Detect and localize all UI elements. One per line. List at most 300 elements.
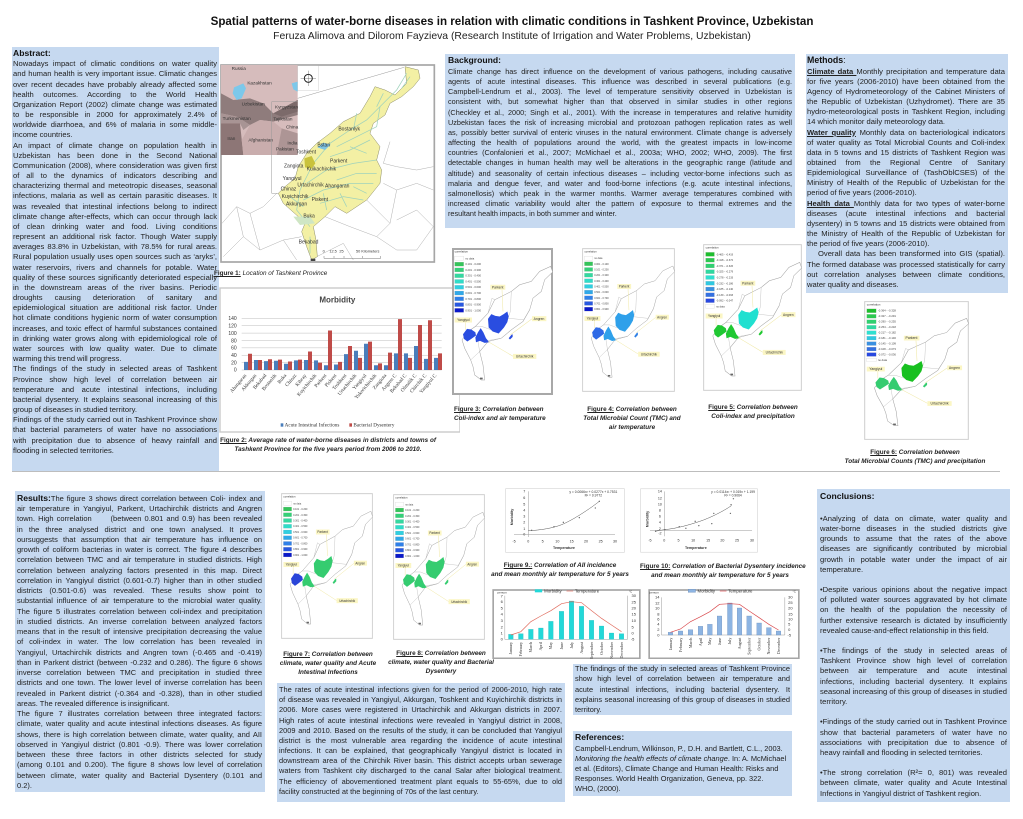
background text: Campbell-Lendrum et al., 2003). The level of temperature sensitivity observed in Uzbekistan is bbox=[448, 87, 792, 96]
methods text: the Ministry of Health of the Republic of Uzbekistan for bbox=[807, 229, 1005, 238]
chart: AII morbidity and temperature by month: April bbox=[538, 641, 543, 650]
caption: figure 2: Tashkent Province for the five years period from 2006 to 2010. bbox=[234, 446, 421, 453]
panel: results bbox=[15, 491, 265, 792]
results text: climate, water quality and acute intestinal infections diseases. As figure bbox=[17, 719, 262, 728]
figure 1: location map: China bbox=[286, 124, 299, 129]
figure 8: map climate, water quality and bacterial dysentery: 0.701 - 0.800 bbox=[405, 543, 420, 547]
figure 9: scatter all incidence vs temperature: 25 bbox=[599, 539, 603, 543]
conclusions text: on the health of the population the necessity of bbox=[820, 605, 1007, 614]
abstract text: droughts causing deterioration of sanitary and bbox=[13, 293, 217, 302]
results text: air temperature in Yangiyul, Parkent, Urtachirchik districts and Angren bbox=[17, 504, 262, 513]
results text: oursuggests that assumption that air temperature has influence on bbox=[17, 535, 262, 544]
figure 4: map TMC and air temperature: 0.201 - 0.300 bbox=[594, 274, 609, 277]
divider line bbox=[12, 471, 1000, 472]
figure 8: map climate, water quality and bacterial dysentery: 0.501 - 0.600 bbox=[405, 532, 420, 535]
figure 9: scatter all incidence vs temperature: 30 bbox=[613, 539, 617, 543]
panel: conclusions bbox=[817, 489, 1010, 802]
figure 1: location map: 0 bbox=[323, 249, 325, 253]
results text: inverse correlation between TMC and precipitation in studied three bbox=[17, 668, 262, 677]
rates text: of disease was revealed in Yangiyul, Akkurgan, Toshkent and Kuyichirchik districts in bbox=[279, 695, 562, 704]
chart: AII morbidity and temperature by month: 4 bbox=[501, 612, 504, 617]
chart: bacterial dysentery morbidity and temperature by month: 15 bbox=[788, 611, 793, 616]
figure 9: scatter all incidence vs temperature: 5 bbox=[542, 539, 544, 543]
figure 10: scatter bacterial dysentery vs temperature: 4 bbox=[659, 521, 661, 525]
caption: figure 7 bbox=[280, 651, 376, 676]
abstract text: that bacterial parameters of water have no associations bbox=[13, 425, 217, 434]
figure 6: map TMC and precipitation: -0.254 - -0.218 bbox=[878, 325, 897, 329]
findings text bbox=[575, 664, 790, 714]
figure 5: map coli-index and precipitation: -0.185 - -0.140 bbox=[716, 287, 734, 291]
caption: figure 5: Figure 5: Correlation between bbox=[708, 404, 798, 411]
figure 10: scatter bacterial dysentery vs temperature: 8 bbox=[659, 509, 661, 513]
figure 6: map TMC and precipitation: -0.181 - -0.146 bbox=[878, 336, 897, 340]
results text: between these three factors in other districts selected for study bbox=[17, 750, 262, 759]
references text: Monitoring the health effects of climate change. In: A. McMichael bbox=[575, 754, 786, 763]
figure 9: scatter all incidence vs temperature: 20 bbox=[584, 539, 588, 543]
conclusions text: further extensive research is dictated by insufficiently bbox=[820, 616, 1007, 625]
abstract text: warming this trend will progress. bbox=[13, 354, 121, 363]
chart: AII morbidity and temperature by month: person bbox=[498, 590, 507, 594]
results text: observed in Yangiyul district (0.801 -0.9). There was lower correlation bbox=[17, 740, 262, 749]
chart: bacterial dysentery morbidity and temperature by month: 20 bbox=[788, 606, 793, 611]
conclusions text: •Findings of the study carried out in Tashkent Province bbox=[820, 717, 1007, 726]
results text: town. High correlation (between 0.801 and 0.9) has been revealed bbox=[17, 514, 262, 523]
figure 7: map climate, water quality and AII: no data bbox=[293, 502, 302, 505]
methods text: hydro-meteorological posts in Tashkent Region, including bbox=[807, 107, 1005, 116]
conclusions text: •Analyzing of data on climate, water quality and bbox=[820, 514, 1007, 523]
rates text: facility constructed at the beginning of 70s of the last century. bbox=[279, 787, 479, 796]
methods text: Ministry of Health of the Republic of Uzbekistan for the bbox=[807, 178, 1005, 187]
abstract text: averages 83.8% in Uzbekistan, with 78.5% for rural areas. bbox=[13, 242, 217, 251]
methods text: Health data Monthly data for two types of water-borne bbox=[807, 199, 1005, 208]
methods text: diseases (acute intestinal infections and bacterial bbox=[807, 209, 1005, 218]
figure 2: morbidity bar chart: Urtachirchik bbox=[337, 373, 358, 397]
figure 2: morbidity bar chart: Yukorichirchik bbox=[354, 373, 378, 401]
abstract text: water sources with low quality water. Due to climate bbox=[13, 344, 217, 353]
figure 6: map TMC and precipitation: -0.217 - -0.182 bbox=[878, 331, 897, 335]
figure 3: map coli-index and air temperature: no data bbox=[465, 256, 475, 260]
chart: AII morbidity and temperature by month: August bbox=[579, 641, 584, 654]
figure 5: map coli-index and precipitation: -0.278 - -0.233 bbox=[716, 275, 734, 279]
caption: figure 3 bbox=[454, 406, 546, 422]
figure 5: map coli-index and precipitation: no data bbox=[716, 304, 725, 308]
figure 4: map TMC and air temperature: 0.701 - 0.800 bbox=[594, 302, 609, 305]
results text: revealed in Parkent district (-0.364 and -0.328), than in other studied bbox=[17, 689, 262, 698]
caption: figure 7: climate, water quality and Acute bbox=[280, 660, 376, 667]
figure 1: location map: Chinaz bbox=[281, 187, 297, 193]
figure 3: map coli-index and air temperature: 0.401 - 0.500 bbox=[465, 279, 481, 283]
methods text: obtained from the Regional Centre of Sanitary bbox=[807, 158, 1005, 167]
figure 1: location map: 50 Kilometers bbox=[356, 249, 379, 253]
figure 7: map climate, water quality and AII: 0.301 - 0.400 bbox=[293, 519, 308, 523]
chart: bacterial dysentery morbidity and temperature by month: 5 bbox=[788, 622, 791, 627]
chart: bacterial dysentery morbidity and temperature by month: 8 bbox=[657, 611, 660, 616]
abstract text: quality of these sources significantly deteriorated especially bbox=[13, 273, 217, 282]
chart: AII morbidity and temperature by month: 1 bbox=[501, 631, 504, 636]
panel: rates of acute intestinal infections bbox=[277, 683, 565, 802]
abstract text: The findings of the study in selected areas of Tashkent bbox=[13, 364, 217, 373]
figure 9: scatter all incidence vs temperature: 5 bbox=[523, 502, 525, 506]
figure 3: map coli-index and air temperature: 0.601 - 0.700 bbox=[465, 291, 481, 295]
chart: AII morbidity and temperature by month: March bbox=[528, 642, 533, 652]
rates text bbox=[279, 685, 562, 796]
figure 1: location map: Kuikachirchik bbox=[307, 167, 337, 173]
chart: AII morbidity and temperature by month: September bbox=[589, 641, 594, 659]
methods text: the Republic of Uzbekistan (Uzhydromet). There are 35 bbox=[807, 97, 1005, 106]
figure 4: map TMC and air temperature: 0.301 - 0.400 bbox=[594, 280, 609, 283]
caption: figure 8: Figure 8: Correlation between bbox=[396, 650, 486, 657]
caption: figure 8: climate, water quality and Bacterial bbox=[388, 659, 494, 666]
conclusions text: between climate, water quality and Acute Intestinal bbox=[820, 778, 1007, 787]
chart: bacterial dysentery morbidity and temperature by month: 4 bbox=[657, 622, 660, 627]
chart: bacterial dysentery morbidity and temperature by month: October bbox=[756, 637, 762, 651]
chart: bacterial dysentery morbidity and temperature by month: November bbox=[766, 637, 771, 655]
figure 9: scatter all incidence vs temperature: 0 bbox=[523, 533, 525, 537]
background text: affecting the health of populations around the world, with the greatest impacts in low-income bbox=[448, 138, 792, 147]
figure 9: scatter all incidence vs temperature: 10 bbox=[555, 539, 559, 543]
figure 9: scatter all incidence vs temperature: 7 bbox=[523, 490, 525, 494]
figure 7: map climate, water quality and AII: 0.701 - 0.800 bbox=[293, 542, 308, 546]
figure 1: location map: Turkmenistan bbox=[223, 116, 251, 121]
figure 2: morbidity bar chart: 80 bbox=[231, 338, 237, 344]
chart: bacterial dysentery morbidity and temperature by month: December bbox=[776, 637, 781, 654]
abstract text: health outcomes. According to the World Health bbox=[13, 90, 217, 99]
findings text: The findings of the study in selected areas of Tashkent Province bbox=[575, 664, 790, 673]
background text: countries (Confalonieri et al., 2007; McMichael et al., 2003a; WHO, 2002; WHO, 2009). The first bbox=[448, 148, 792, 157]
figure 2: morbidity bar chart: 0 bbox=[234, 368, 237, 374]
figure 1: location map: Afghanistan bbox=[248, 138, 273, 143]
methods text: Water quality Monthly data on bacteriological indicators bbox=[807, 128, 1005, 137]
methods text: 14 which monitor daily meteorology data. bbox=[807, 117, 945, 126]
figure 9: scatter all incidence vs temperature: Morbidity bbox=[510, 508, 514, 525]
conclusions text: •The strong correlation (R²= 0, 801) was revealed bbox=[820, 768, 1007, 777]
figure 3: map coli-index and air temperature: 0.901 - 1.000 bbox=[465, 308, 481, 312]
chart: AII morbidity and temperature by month: 5 bbox=[501, 605, 504, 610]
figure 5: map coli-index and precipitation: -0.465 - -0.419 bbox=[716, 252, 734, 256]
conclusions text: revealed cause-and-effect relationship in this field. bbox=[820, 626, 989, 635]
figure 1: location map: Russia bbox=[232, 66, 246, 71]
figure 1: location map: Toshkent bbox=[296, 149, 317, 155]
chart: bacterial dysentery morbidity and temperature by month: 0 bbox=[788, 627, 791, 632]
figure 7: map climate, water quality and AII: 0.501 - 0.600 bbox=[293, 531, 308, 534]
methods text: Overall data has been transformed into GIS (spatial). bbox=[818, 249, 1005, 258]
figure 6: map TMC and precipitation: -0.290 - -0.255 bbox=[878, 320, 897, 324]
findings text: explains seasonal increasing of this group of diseases in studied bbox=[575, 695, 790, 704]
background text: (Checkley et al., 2000; Singh et al., 2001). With the increase in temperatures and relative humidity bbox=[448, 108, 792, 117]
figure 8: map climate, water quality and bacterial dysentery: 0.601 - 0.700 bbox=[405, 538, 420, 541]
figure 2: morbidity bar chart: Yangiyul bbox=[352, 373, 369, 391]
figure 10: scatter bacterial dysentery vs temperature: Morbidity bbox=[646, 511, 650, 527]
methods text: of water quality as Total Microbial Counts and Coli-index bbox=[807, 138, 1005, 147]
figure 2: morbidity bar chart: Olmalik C bbox=[400, 373, 419, 394]
chart: bacterial dysentery morbidity and temperature by month: January bbox=[668, 638, 673, 650]
chart: AII morbidity and temperature by month: -5 bbox=[631, 637, 635, 642]
chart: AII morbidity and temperature by month: 0 bbox=[501, 637, 504, 642]
figure 10: scatter bacterial dysentery vs temperature: 12 bbox=[658, 496, 662, 500]
chart: bacterial dysentery morbidity and temperature by month: 6 bbox=[657, 617, 660, 622]
figure 8: map climate, water quality and bacterial dysentery: no data bbox=[405, 503, 414, 506]
figure 1: location map: Urtachirchik bbox=[297, 183, 324, 189]
heading: background: Background: bbox=[448, 55, 501, 65]
chart: bacterial dysentery morbidity and temperature by month: 10 bbox=[655, 606, 660, 611]
results text: correlation between TMC and air temperature in studied districts. High bbox=[17, 555, 262, 564]
abstract text: Province show high level of correlation between air bbox=[13, 375, 217, 384]
results text: districts (0.501-0.6) was revealed. These results show point to bbox=[17, 586, 262, 595]
figure 5: map coli-index and precipitation: -0.139 - -0.093 bbox=[716, 293, 734, 297]
figure 2: morbidity bar chart: 100 bbox=[228, 331, 237, 337]
rates text: 2009 and 2010. Based on the results of the study, it can be concluded that Yangiyul bbox=[279, 726, 562, 735]
methods text: The formed database was processed statistically for carry bbox=[807, 260, 1005, 269]
figure 8: map climate, water quality and bacterial dysentery: 0.301 - 0.400 bbox=[405, 520, 420, 524]
background text: resultant health impacts, in both summer and winter. bbox=[448, 209, 617, 218]
figure 6: map TMC and precipitation: -0.072 - -0.036 bbox=[878, 353, 897, 356]
chart: bacterial dysentery morbidity and temperature by month: person bbox=[650, 590, 659, 594]
figure 2: morbidity bar chart: Akkurgan bbox=[240, 373, 258, 393]
figure 4: map TMC and air temperature: correlation bbox=[584, 249, 597, 254]
figure 1: location map: Kuyichirchik bbox=[282, 194, 309, 200]
methods text: dysentery) in 5 towns and 15 districts were obtained from bbox=[807, 219, 1005, 228]
chart: AII morbidity and temperature by month: February bbox=[518, 642, 523, 656]
figure 7: map climate, water quality and AII bbox=[281, 493, 373, 639]
figure 8: map climate, water quality and bacterial dysentery: correlation bbox=[395, 496, 408, 500]
abstract text: Communication (2008), where consideration was given first bbox=[13, 161, 217, 170]
heading: methods: Methods: bbox=[807, 55, 846, 65]
figure 9: scatter all incidence vs temperature: 0 bbox=[527, 539, 529, 543]
figure 6: map TMC and precipitation: -0.364 - -0.328 bbox=[878, 309, 897, 313]
abstract text: Organization Report (2002) climate change was estimated bbox=[13, 100, 217, 109]
background text: altitude) and seasonality of certain infectious diseases – including vector-borne infections such as bbox=[448, 169, 792, 178]
figure 2: morbidity bar chart: 40 bbox=[231, 353, 237, 359]
figure 7: map climate, water quality and AII: correlation bbox=[283, 495, 296, 499]
rates text: High rates of acute intestinal infections were revealed in Yangiyul district in 2008, bbox=[279, 716, 562, 725]
abstract text: of clean drinking water and food. Living conditions bbox=[13, 222, 217, 231]
figure 5: map coli-index and precipitation: -0.418 - -0.372 bbox=[716, 258, 734, 262]
authors subtitle: Feruza Alimova and Dilorom Fayzieva (Research Institute of Irrigation and Water Problems, Uzbekistan) bbox=[273, 31, 751, 42]
chart: bacterial dysentery morbidity and temperature by month: April bbox=[698, 637, 703, 646]
caption: figure 2: Figure 2: Average rate of water-borne diseases in districts and towns of bbox=[220, 437, 436, 444]
results text: in studied districts. An inverse correlation between analyzed factors bbox=[17, 617, 262, 626]
figure 9: scatter all incidence vs temperature: Temperature bbox=[553, 546, 575, 550]
results text bbox=[17, 493, 262, 790]
chart: bacterial dysentery morbidity and temperature by month: °C bbox=[793, 590, 797, 594]
figure 2: morbidity bar chart: 120 bbox=[228, 323, 237, 329]
figure 2: morbidity bar chart: Morbidity bbox=[319, 295, 356, 304]
figure 4: map TMC and air temperature: 0.801 - 0.900 bbox=[594, 308, 609, 311]
background text: Uzbekistan faces the risk of increasing microbial and protozoan pathogen replication rates as well bbox=[448, 118, 792, 127]
chart: bacterial dysentery morbidity and temperature by month: June bbox=[717, 637, 722, 645]
background text: agents of acute intestinal diseases. This influence was described in several publications (e.g. bbox=[448, 77, 792, 86]
chart: bacterial dysentery morbidity and temperature by month: September bbox=[746, 637, 752, 655]
conclusions text: •Despite various opinions about the negative impact bbox=[820, 585, 1007, 594]
abstract text: infections, malaria as well as certain parasitic diseases. It bbox=[13, 191, 217, 200]
chart: AII morbidity and temperature by month: December bbox=[619, 641, 624, 658]
methods text: the period of five years (2006-2010). bbox=[807, 239, 929, 248]
chart: bacterial dysentery morbidity and temperature by month: February bbox=[678, 638, 683, 652]
caption: figure 10: and mean monthly air temperature for 5 years bbox=[651, 572, 789, 579]
abstract text: to be responsible in 2000 for approximately 2.4% of bbox=[13, 110, 217, 119]
figure 6: map TMC and precipitation: correlation bbox=[867, 303, 881, 306]
figure 4: map TMC and air temperature: no data bbox=[594, 257, 603, 260]
abstract text: group of diseases in studied territory. bbox=[13, 405, 137, 414]
figure 10: scatter bacterial dysentery vs temperature: R² = 0.9064 bbox=[724, 493, 742, 497]
chart: bacterial dysentery morbidity and temperature by month: 2 bbox=[657, 627, 660, 632]
chart: AII morbidity and temperature by month: 3 bbox=[501, 618, 504, 623]
figure 1: location map: Bostanlyk bbox=[338, 127, 361, 133]
figure 3: map coli-index and air temperature: correlation bbox=[455, 250, 468, 254]
conclusions text: show that bacterial parameters of water have no bbox=[820, 728, 1007, 736]
figure 4: map TMC and air temperature: 0.001 - 0.100 bbox=[594, 263, 609, 266]
figure 10: scatter bacterial dysentery vs temperature: -5 bbox=[648, 538, 652, 542]
figure 1: location map: Bekabad bbox=[299, 239, 319, 245]
figure 1: location map: Tajikistan bbox=[273, 117, 293, 122]
figure 4: map TMC and air temperature: 0.101 - 0.200 bbox=[594, 268, 609, 271]
figure 6: map TMC and precipitation: no data bbox=[878, 358, 888, 362]
rates text: The efficiency of abovementioned treatment plant equals to 55-65%, due to old bbox=[279, 777, 562, 786]
conclusions text: water-borne diseases in the studied districts give bbox=[820, 524, 1007, 533]
rates text: infections. It can be explained, that geographically Yangiyul district is located in bbox=[279, 746, 562, 755]
caption: figure 9: Figure 9.: Correlation of AII incidence bbox=[504, 562, 616, 569]
rates text: waters from Tashkent city discharged to the canal Salar after biological treatment. bbox=[279, 766, 562, 775]
results text: growth of coliform bacterias in water is correct. The figure 4 describes bbox=[17, 545, 262, 554]
rates text: district is the most vulnerable area regarding the incidence of acute intestinal bbox=[279, 736, 562, 745]
chart: bacterial dysentery morbidity and temperature by month: March bbox=[688, 638, 693, 648]
chart: bacterial dysentery morbidity and temperature by month: 10 bbox=[788, 617, 793, 622]
results text: Yangiyul, Urtachirchik districts and Angren town (-0.465 and -0.419) bbox=[17, 648, 262, 657]
figure 2: morbidity bar chart: Piskent bbox=[324, 373, 339, 389]
figure 10: scatter bacterial dysentery vs temperature: y = 0.0114x² + 0.019x + 1.199 bbox=[711, 490, 755, 494]
figure 2: morbidity bar chart: 60 bbox=[231, 346, 237, 352]
results text: The figure 5 illustrates correlation between coli-index and precipitation bbox=[17, 607, 262, 616]
conclusions text: territory. bbox=[820, 697, 847, 706]
chart: bacterial dysentery morbidity and temperature by month: 14 bbox=[655, 595, 660, 600]
figure 2: morbidity bar chart: Parkent bbox=[313, 373, 329, 389]
references text: Campbell-Lendrum, Wilkinson, P., D.H. and Bartlett, C.L., 2003. bbox=[575, 744, 783, 753]
background text bbox=[448, 67, 792, 218]
background text: malaria and dengue fever, and water and food-borne infections (e.g. acute intestinal infections, bbox=[448, 179, 792, 188]
chart: AII morbidity and temperature by month: 5 bbox=[632, 624, 634, 629]
conclusions text: diseases are significantly contributed by microbial bbox=[820, 544, 1007, 553]
figure 3: map coli-index and air temperature: 0.101 - 0.200 bbox=[465, 262, 481, 266]
chart: AII morbidity and temperature by month: 20 bbox=[632, 606, 637, 611]
abstract text: Rural population usually uses open sources such as ‘aryks’, bbox=[13, 252, 217, 261]
caption: figure 7: Intestinal Infections bbox=[298, 669, 358, 676]
figure 9: scatter all incidence vs temperature: 2 bbox=[523, 521, 525, 525]
chart: bacterial dysentery morbidity and temperature by month: August bbox=[737, 637, 742, 649]
figure 2: morbidity bar chart: Chinaz bbox=[284, 373, 299, 388]
title: Spatial patterns of water-borne diseases in relation with climatic conditions in Tashkent Province, Uzbekistan bbox=[211, 15, 813, 28]
figure 5: map coli-index and precipitation: -0.371 - -0.326 bbox=[716, 264, 734, 268]
figure 2: morbidity bar chart: Toshkent bbox=[331, 373, 349, 391]
figure 10: scatter bacterial dysentery vs temperature: -2 bbox=[658, 532, 662, 536]
figure 8: map climate, water quality and bacterial dysentery: 0.801 - 0.900 bbox=[405, 549, 420, 552]
findings text: show high level of correlation between air temperature and bbox=[575, 674, 790, 683]
results text: 0.2). bbox=[17, 781, 32, 790]
figure 5: map coli-index and precipitation: -0.325 - -0.279 bbox=[716, 270, 734, 274]
conclusions text: heavy rainfall and flooding in selected territories. bbox=[820, 748, 983, 757]
chart: bacterial dysentery morbidity and temperature by month: -5 bbox=[788, 632, 792, 637]
chart: AII morbidity and temperature by month: 7 bbox=[501, 593, 504, 598]
heading: references: References: bbox=[575, 732, 624, 742]
caption: figure 7: Figure 7: Correlation between bbox=[283, 651, 373, 658]
figure 10: scatter bacterial dysentery vs temperature: 10 bbox=[691, 538, 695, 542]
figure 2: morbidity bar chart: Bekabad C bbox=[389, 373, 409, 394]
figure 1: location map: Iran bbox=[227, 136, 236, 141]
conclusions text: Infections in Yangiyul district of Tashkent region. bbox=[820, 789, 981, 798]
figure 1: location map: Piskent bbox=[312, 197, 329, 203]
conclusions text: Tashkent Province show high level of correlation bbox=[820, 656, 1007, 665]
figure 1: location map bbox=[220, 64, 436, 263]
results text: substantial influence of air temperature to the microbial water quality. bbox=[17, 596, 262, 605]
results text: in the three analysed district and one town analysed. It proves bbox=[17, 525, 262, 534]
figure 2: morbidity bar chart: 20 bbox=[231, 360, 237, 366]
figure 4: map TMC and air temperature: 0.401 - 0.500 bbox=[594, 285, 609, 288]
figure 3: map coli-index and air temperature: 0.201 - 0.300 bbox=[465, 268, 481, 272]
figure 3: map coli-index and air temperature: 0.501 - 0.600 bbox=[465, 285, 481, 289]
references text: Responses. World Health Organization, Geneva, pp. 322. bbox=[575, 774, 763, 783]
figure 1: location map: Uzbekistan bbox=[242, 101, 265, 106]
figure 2: morbidity bar chart: Angren C bbox=[381, 373, 399, 392]
figure 2: morbidity bar chart: 140 bbox=[228, 316, 237, 322]
background text: Climate change has direct influence on the development of various pathogens, including causative bbox=[448, 67, 792, 76]
chart: AII morbidity and temperature by month: 2 bbox=[501, 624, 504, 629]
caption: figure 5: Coli-index and precipitation bbox=[711, 413, 795, 420]
background text: increased climatic variability would alter the pattern of exposure to thermal extremes and the bbox=[448, 199, 792, 208]
results text: than in Parkent district (between -0.232 and 0.286). The figure 6 shows bbox=[17, 658, 262, 667]
rates text: The rates of acute intestinal infections given for the period of 2006-2010, high rate bbox=[279, 685, 562, 694]
figure 10: scatter bacterial dysentery vs temperature: 15 bbox=[706, 538, 710, 542]
chart: AII morbidity and temperature by month: July bbox=[569, 642, 574, 649]
chart: AII morbidity and temperature by month: 25 bbox=[632, 599, 637, 604]
chart: AII morbidity and temperature by month: 10 bbox=[632, 618, 637, 623]
abstract text: in drinking water grows along with epidemiological role of bbox=[13, 334, 217, 343]
figure 9: scatter all incidence vs temperature: y = 0.0066x² + 0.0277x + 0.7531 bbox=[569, 490, 617, 494]
results text: areas. The revealed difference is insignificant. bbox=[17, 699, 169, 708]
caption: figure 9: and mean monthly air temperature for 5 years bbox=[491, 571, 629, 578]
heading: abstract: Abstract: bbox=[13, 48, 51, 58]
rates text: 2006. More cases were registered in Urtachirchik and Akkurgan districts in 2007. bbox=[279, 705, 562, 714]
caption: figure 4: Figure 4: Correlation between bbox=[587, 406, 677, 413]
abstract text: was revealed that intestinal infections belong to indirect bbox=[13, 202, 217, 211]
conclusions text: infections, including bacterial dysentery. It explains bbox=[820, 677, 1007, 686]
figure 3: map coli-index and air temperature bbox=[452, 248, 553, 395]
results text: The figure 7 illustrates correlation between three integrated factors: bbox=[17, 709, 262, 718]
caption: figure 4: air temperature bbox=[609, 424, 655, 431]
figure 1: location map: Buka bbox=[303, 213, 315, 219]
figure 1: location map: Kazakhstan bbox=[247, 81, 272, 86]
chart: bacterial dysentery morbidity and temperature by month: 12 bbox=[655, 600, 660, 605]
findings text: acute intestinal infections, including bacterial dysentery. It bbox=[575, 685, 790, 694]
results text: districts and one town. The lower level of inverse correlation has been bbox=[17, 678, 262, 687]
abstract text: temperature and acute intestinal infections, including bbox=[13, 385, 217, 394]
figure 1: location map: 12.5 bbox=[329, 249, 337, 253]
figure 1: location map: Parkent bbox=[330, 159, 348, 165]
abstract text: worldwide diarrhoea, and 6% of malaria in some middle- bbox=[13, 120, 217, 129]
abstract text: in the downstream areas of the river basins. Periodic bbox=[13, 283, 217, 292]
results text: of coli-index in water. The low correlation has been revealed in bbox=[17, 637, 262, 646]
methods text: data in 5 towns and 15 districts of Tashkent Region was bbox=[807, 148, 1005, 157]
chart: bacterial dysentery morbidity and temperature by month: May bbox=[707, 638, 712, 645]
caption: figure 2 bbox=[220, 437, 436, 453]
methods text: Climate data Monthly precipitation and temperature data bbox=[807, 67, 1005, 76]
figure 8: map climate, water quality and bacterial dysentery: 0.201 - 0.300 bbox=[405, 515, 420, 518]
figure 2: morbidity bar chart: Chirchik C bbox=[409, 373, 429, 394]
figure 6: map TMC and precipitation: -0.327 - -0.291 bbox=[878, 314, 897, 318]
results text: between climate, water quality and Bacterial Dysentery (0.101 and bbox=[17, 771, 262, 780]
figure 1: location map: Akkurgan bbox=[286, 202, 307, 208]
conclusions text: of polluted water sources aggravated by hot climate bbox=[820, 595, 1007, 604]
figure 7: map climate, water quality and AII: 0.201 - 0.300 bbox=[293, 514, 308, 517]
caption: figure 4 bbox=[583, 406, 681, 431]
